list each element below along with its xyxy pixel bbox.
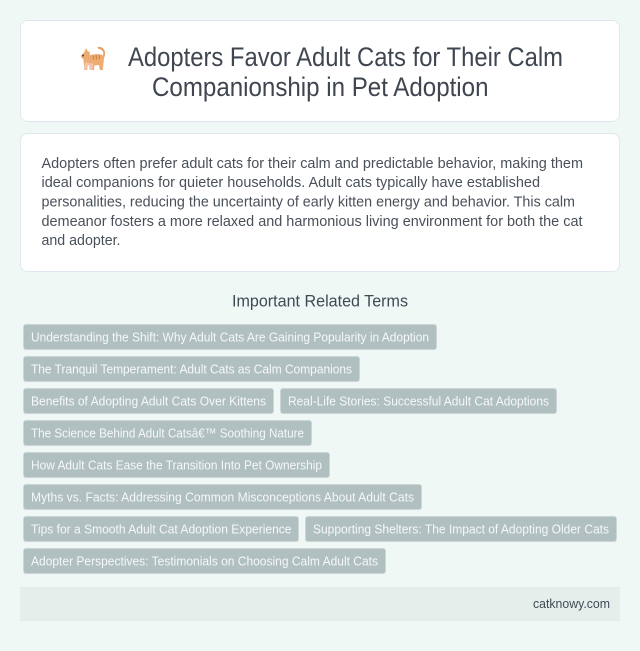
tag: Adopter Perspectives: Testimonials on Choosing Calm Adult Cats <box>31 554 378 568</box>
tag <box>24 324 436 350</box>
tag: The Science Behind Adult Catsâ€™ Soothing Nature <box>31 426 304 440</box>
tag: Benefits of Adopting Adult Cats Over Kittens <box>31 394 266 408</box>
tag <box>24 420 312 446</box>
tag <box>306 516 616 542</box>
summary text <box>42 155 583 249</box>
summary text: demeanor fosters a more relaxed and harmonious living environment for both the cat <box>42 213 583 230</box>
summary text: Adopters often prefer adult cats for their calm and predictable behavior, making them <box>42 155 583 172</box>
panel: title card <box>20 20 620 122</box>
tag <box>24 356 360 382</box>
summary text: and adopter. <box>42 232 120 249</box>
title text <box>128 42 563 102</box>
title text: Companionship in Pet Adoption <box>152 72 488 102</box>
tag <box>24 516 298 542</box>
footer text: catknowy.com <box>533 596 610 611</box>
tag: Supporting Shelters: The Impact of Adopting Older Cats <box>313 522 609 536</box>
tag: Tips for a Smooth Adult Cat Adoption Experience <box>31 522 292 536</box>
tag: Myths vs. Facts: Addressing Common Misconceptions About Adult Cats <box>31 490 414 504</box>
title text: Adopters Favor Adult Cats for Their Calm <box>128 42 563 72</box>
tag <box>24 484 422 510</box>
heading: important related terms: Important Related Terms <box>232 292 408 310</box>
footer bar <box>20 587 620 621</box>
panel: summary card <box>20 134 620 272</box>
tag: How Adult Cats Ease the Transition Into Pet Ownership <box>31 458 322 472</box>
tag <box>280 388 556 414</box>
tag: The Tranquil Temperament: Adult Cats as Calm Companions <box>31 362 352 376</box>
tag <box>24 388 274 414</box>
tag: Understanding the Shift: Why Adult Cats Are Gaining Popularity in Adoption <box>31 330 429 344</box>
summary text: personalities, reducing the uncertainty of early kitten energy and behavior. This calm <box>42 194 575 210</box>
panel: related term tags <box>24 324 616 574</box>
tag <box>24 452 330 478</box>
tag: Real-Life Stories: Successful Adult Cat Adoptions <box>288 394 549 408</box>
icon: cat <box>81 47 105 70</box>
summary text: ideal companions for quieter households. Adult cats typically have established <box>42 174 540 191</box>
tag <box>24 548 386 574</box>
